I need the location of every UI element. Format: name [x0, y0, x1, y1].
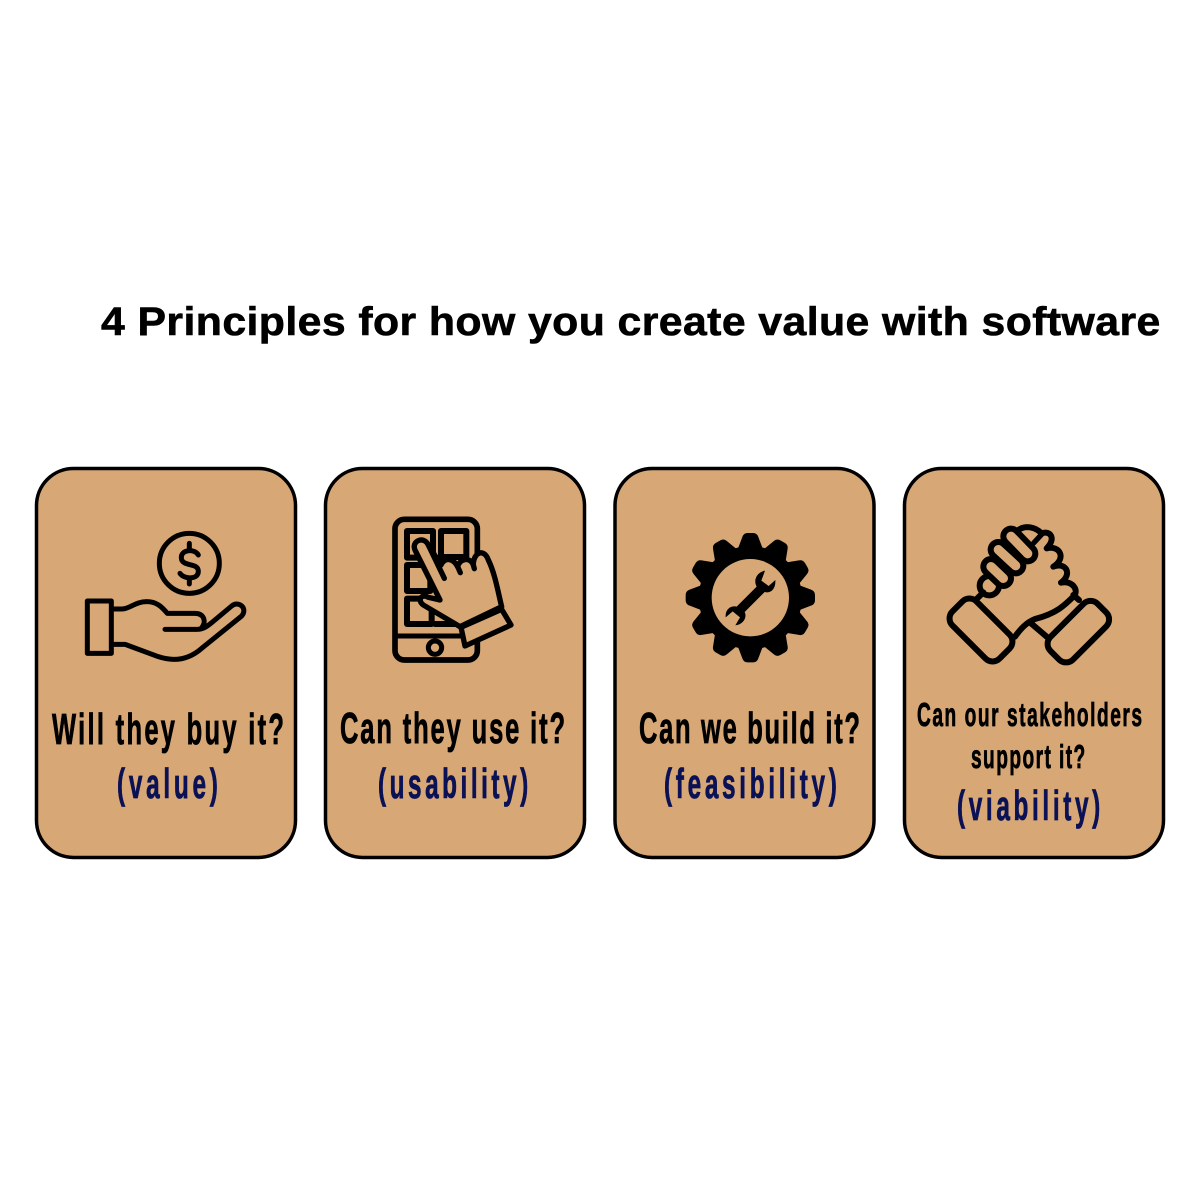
panel: viability — [904, 468, 1164, 858]
question: can we build it: Can we build it? — [639, 703, 860, 753]
panel: usability — [326, 468, 584, 858]
question: can they use it: Can they use it? — [340, 703, 565, 753]
icon: clasped hands — [945, 527, 1113, 667]
question: will they buy it: Will they buy it? — [52, 704, 284, 754]
question: can our stakeholders support it: Can our stakeholders — [917, 697, 1142, 733]
question: can our stakeholders support it — [917, 697, 1142, 775]
icon: hand tapping phone — [395, 519, 511, 660]
title: 4 Principles for how you create value with software — [101, 299, 1160, 344]
label: viability: (viability) — [957, 783, 1100, 830]
panel: feasibility — [615, 468, 874, 858]
icon: hand holding dollar coin — [87, 533, 244, 659]
icon: gear with wrench — [686, 533, 815, 662]
panel: value — [36, 468, 296, 858]
label: feasibility: (feasibility) — [664, 761, 837, 808]
label: value: (value) — [117, 761, 218, 808]
question: can our stakeholders support it: support it? — [971, 739, 1085, 775]
label: usability: (usability) — [378, 761, 528, 808]
